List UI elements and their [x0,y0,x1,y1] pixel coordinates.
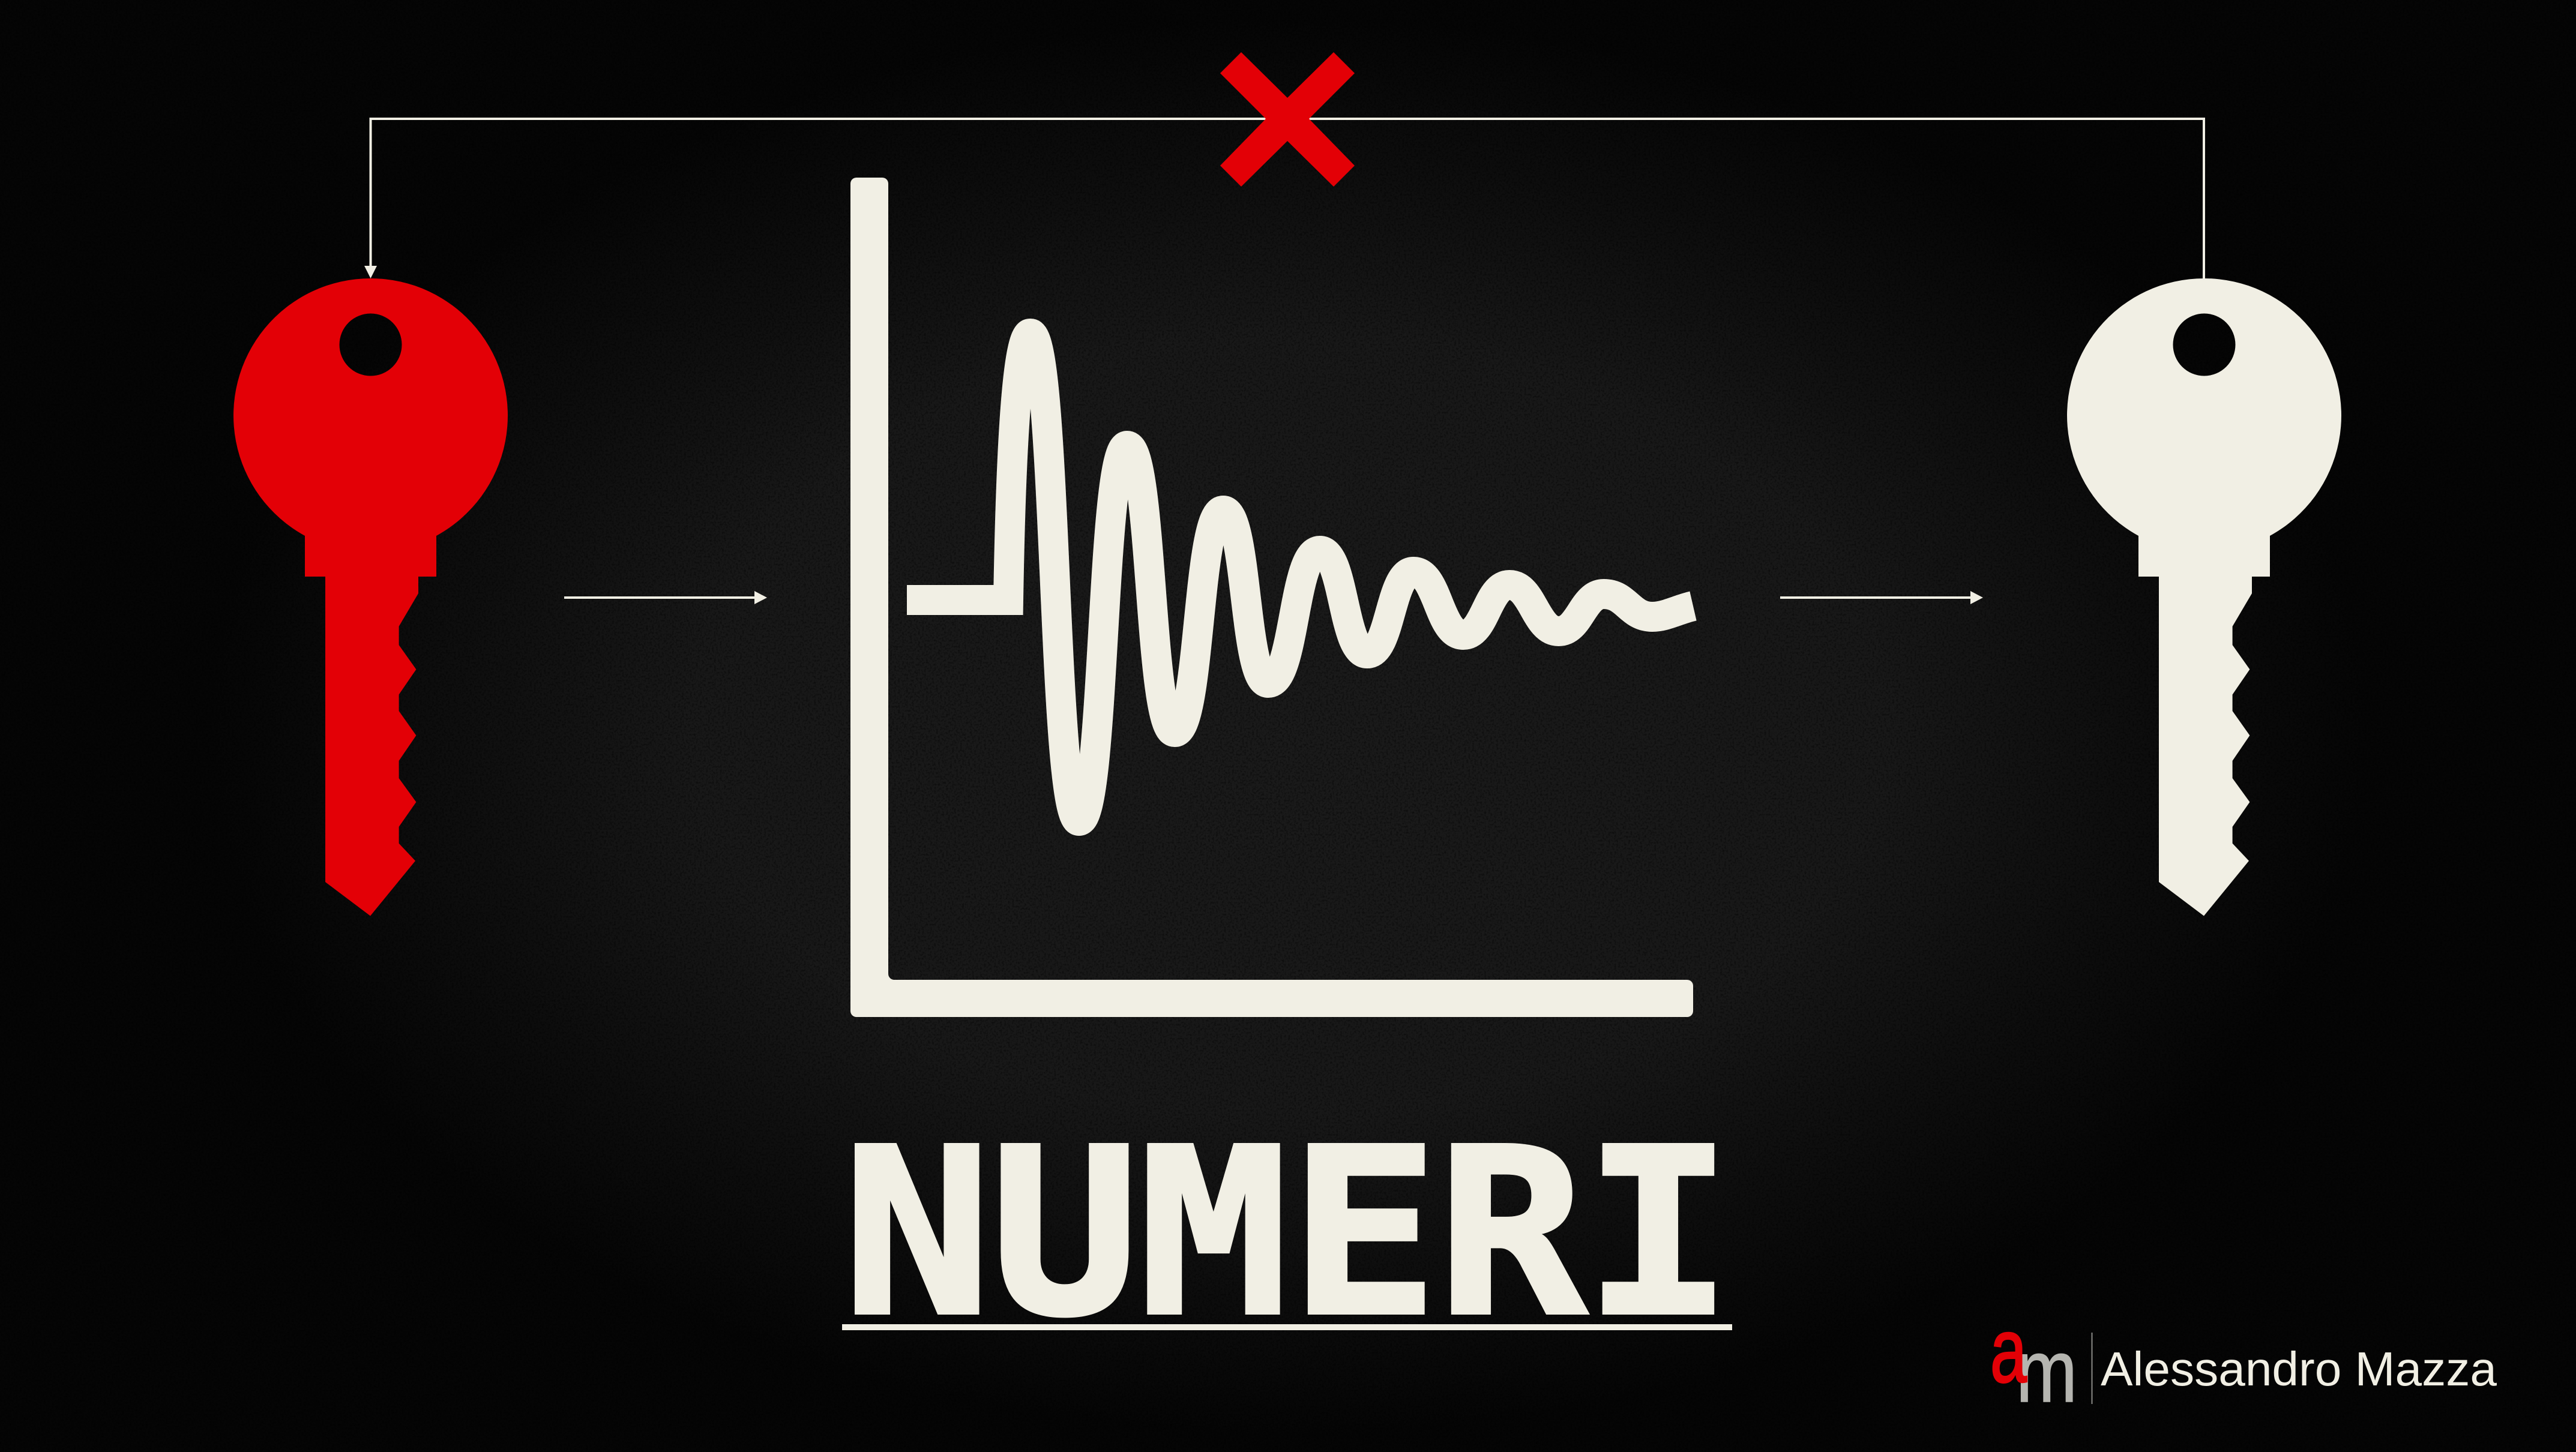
logo monogram: a [1990,1300,2027,1402]
title: NUMERI [842,1099,1733,1367]
title underline [842,1324,1732,1330]
icon: red key [233,278,508,916]
arrow: chart to white key [1780,591,1983,604]
arrow: red key to chart [564,591,767,604]
logo monogram [1990,1300,2077,1421]
chart: damped oscillation [850,178,1693,1017]
icon: red cross [1220,52,1355,187]
logo monogram: m [2016,1322,2077,1421]
logo divider [2091,1333,2092,1404]
icon: white key [2067,278,2341,916]
chart wave line [907,334,1693,821]
connector line from white key to red key [364,118,2205,280]
logo: Alessandro Mazza [1990,1300,2497,1421]
chart axes [850,178,1693,1017]
logo name: Alessandro Mazza [2101,1342,2497,1396]
